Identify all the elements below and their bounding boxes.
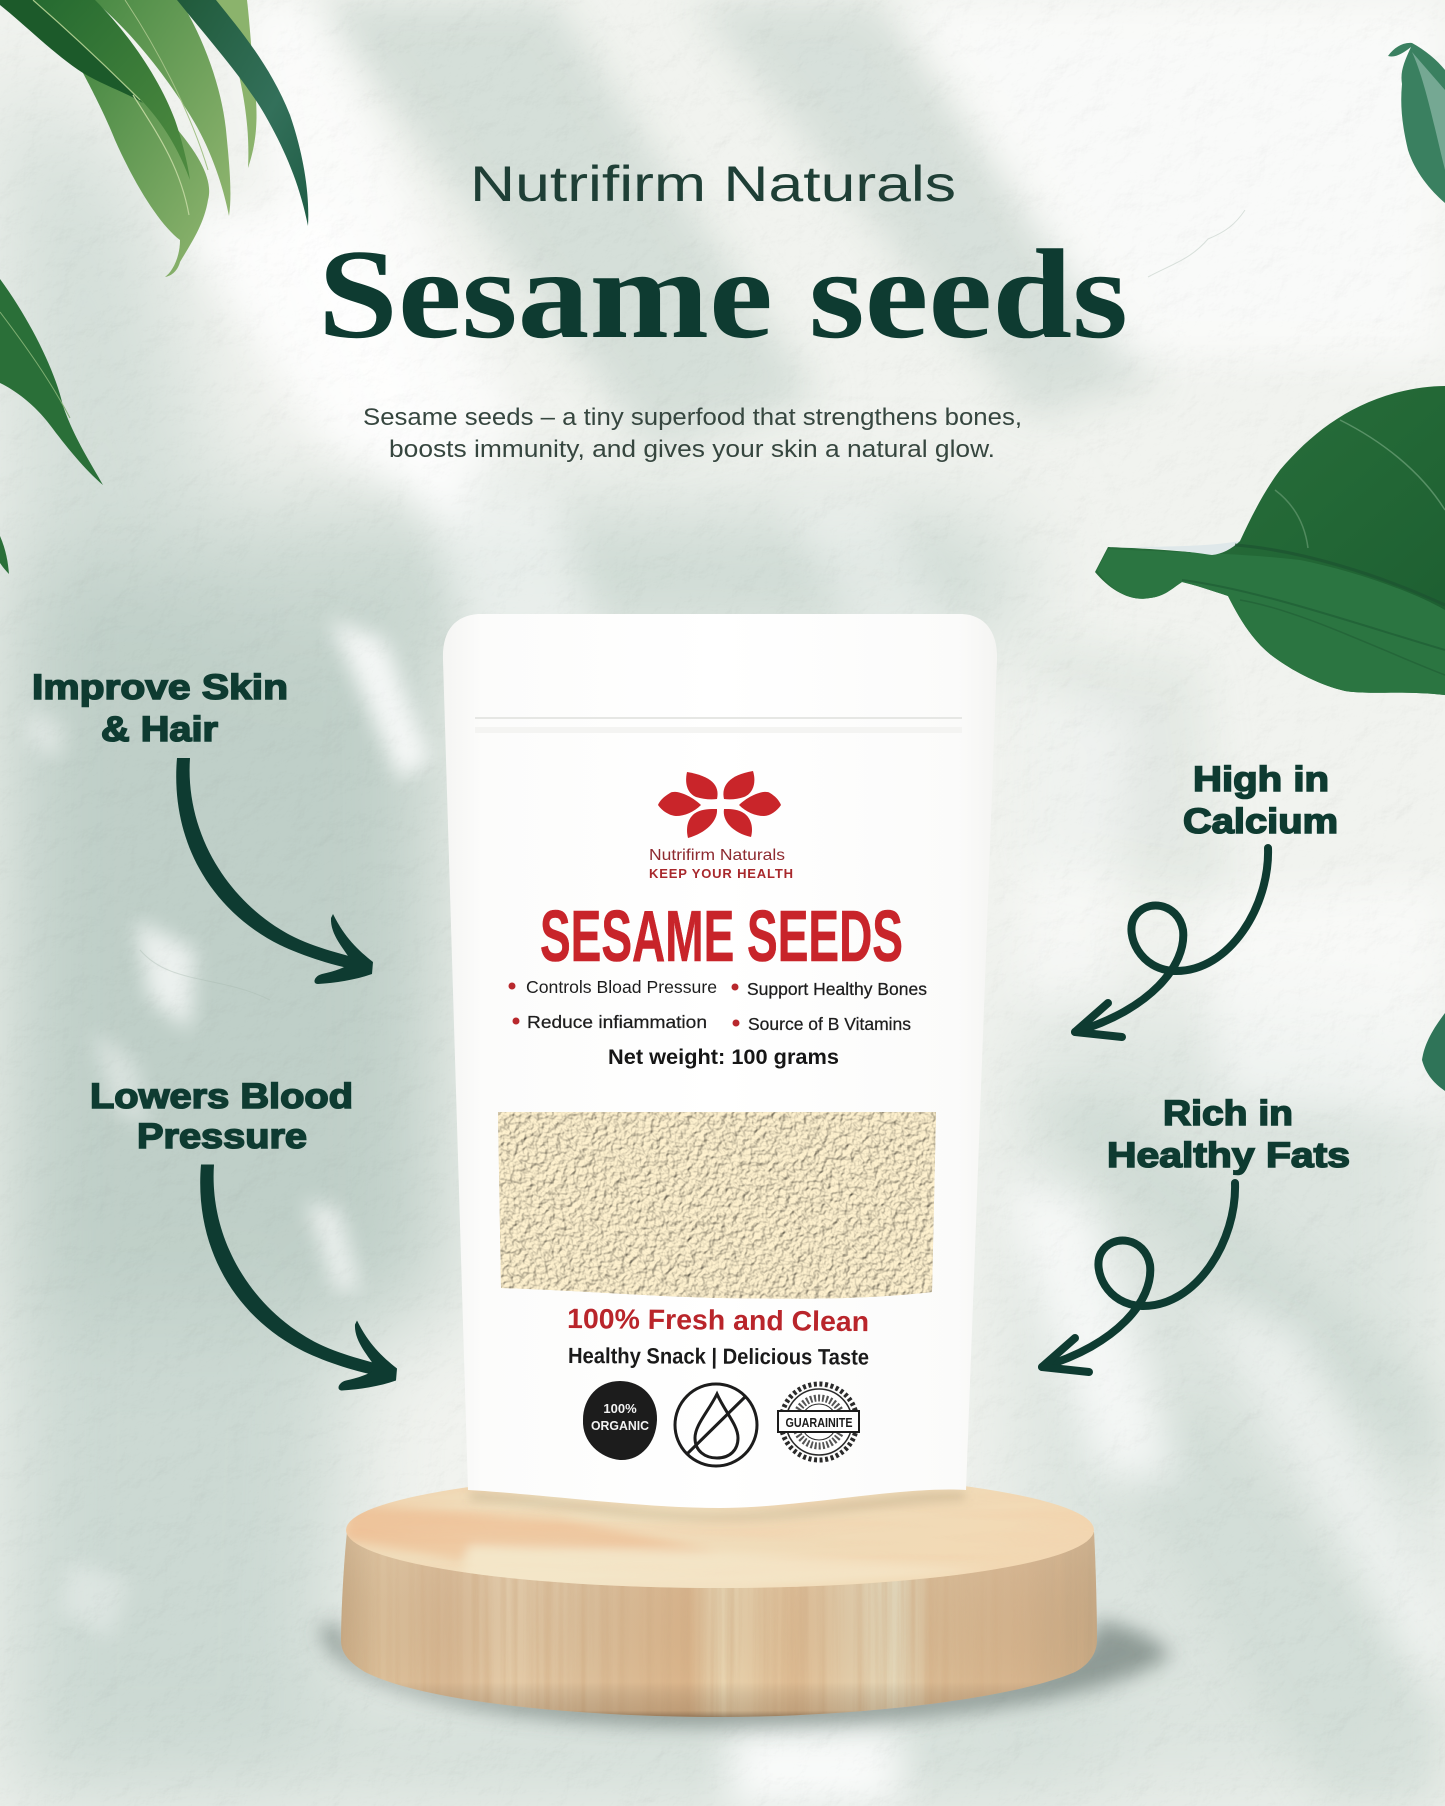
pouch benefit bullets: Reduce infiammation — [527, 1012, 707, 1032]
callout: improve skin and hair: & Hair — [101, 710, 218, 749]
badge: organic: ORGANIC — [591, 1418, 650, 1433]
badge: guarantee seal — [778, 1384, 859, 1460]
platform side — [341, 1530, 1097, 1720]
logo wordmark: Nutrifirm Naturals — [649, 847, 785, 864]
badge: organic: 100% — [603, 1401, 637, 1416]
arrow: blood pressure — [200, 1164, 397, 1390]
leaves: left edge — [0, 279, 103, 574]
callout: lowers blood pressure — [90, 1077, 353, 1156]
callout: rich in healthy fats: Rich in — [1163, 1094, 1293, 1133]
logo flower — [658, 771, 781, 838]
brand name heading: Nutrifirm Naturals — [470, 156, 956, 212]
callout: rich in healthy fats: Healthy Fats — [1107, 1136, 1350, 1175]
logo wordmark: KEEP YOUR HEALTH — [649, 866, 793, 881]
wooden platform — [340, 1470, 1100, 1720]
leaves: top-left cluster — [0, 0, 308, 277]
intro text: boosts immunity, and gives your skin a natural glow. — [389, 436, 995, 463]
badge: organic — [583, 1381, 657, 1460]
seed window — [495, 1108, 940, 1303]
snack tagline: Healthy Snack | Delicious Taste — [568, 1343, 869, 1370]
leaf: top right — [1388, 43, 1445, 203]
callout: improve skin and hair — [32, 668, 288, 749]
platform top — [346, 1486, 1094, 1588]
pouch benefit bullets: Controls Bload Pressure — [526, 977, 717, 997]
leaf: large right — [1095, 386, 1445, 695]
callout: high in calcium: High in — [1193, 760, 1329, 799]
callout: high in calcium: Calcium — [1183, 802, 1338, 841]
pouch benefit bullets: Support Healthy Bones — [747, 979, 927, 999]
badge: guarantee seal: GUARAINITE — [786, 1415, 853, 1430]
badge: no oil — [675, 1384, 757, 1466]
pouch title: SESAME SEEDS — [540, 897, 903, 977]
net weight: Net weight: 100 grams — [608, 1046, 839, 1069]
leaf: lower right edge — [1422, 1013, 1445, 1091]
arrow: skin and hair — [176, 758, 373, 984]
intro text — [363, 404, 1022, 463]
arrow: calcium — [1075, 848, 1268, 1037]
platform shadow — [320, 1620, 1172, 1726]
fresh claim: 100% Fresh and Clean — [567, 1303, 869, 1337]
callout: improve skin and hair: Improve Skin — [32, 668, 288, 707]
pouch benefit bullets — [508, 977, 927, 1034]
pouch shadow on platform — [470, 1492, 965, 1520]
logo wordmark — [649, 847, 793, 881]
pouch benefit bullets: Source of B Vitamins — [748, 1014, 911, 1034]
title: Sesame seeds — [318, 223, 1128, 365]
product pouch — [443, 614, 997, 1508]
intro text: Sesame seeds – a tiny superfood that strengthens bones, — [363, 404, 1022, 431]
callout: lowers blood pressure: Pressure — [137, 1117, 307, 1156]
callout: lowers blood pressure: Lowers Blood — [90, 1077, 353, 1116]
callout: high in calcium — [1183, 760, 1338, 841]
callout: rich in healthy fats — [1107, 1094, 1350, 1175]
arrow: healthy fats — [1042, 1183, 1235, 1372]
